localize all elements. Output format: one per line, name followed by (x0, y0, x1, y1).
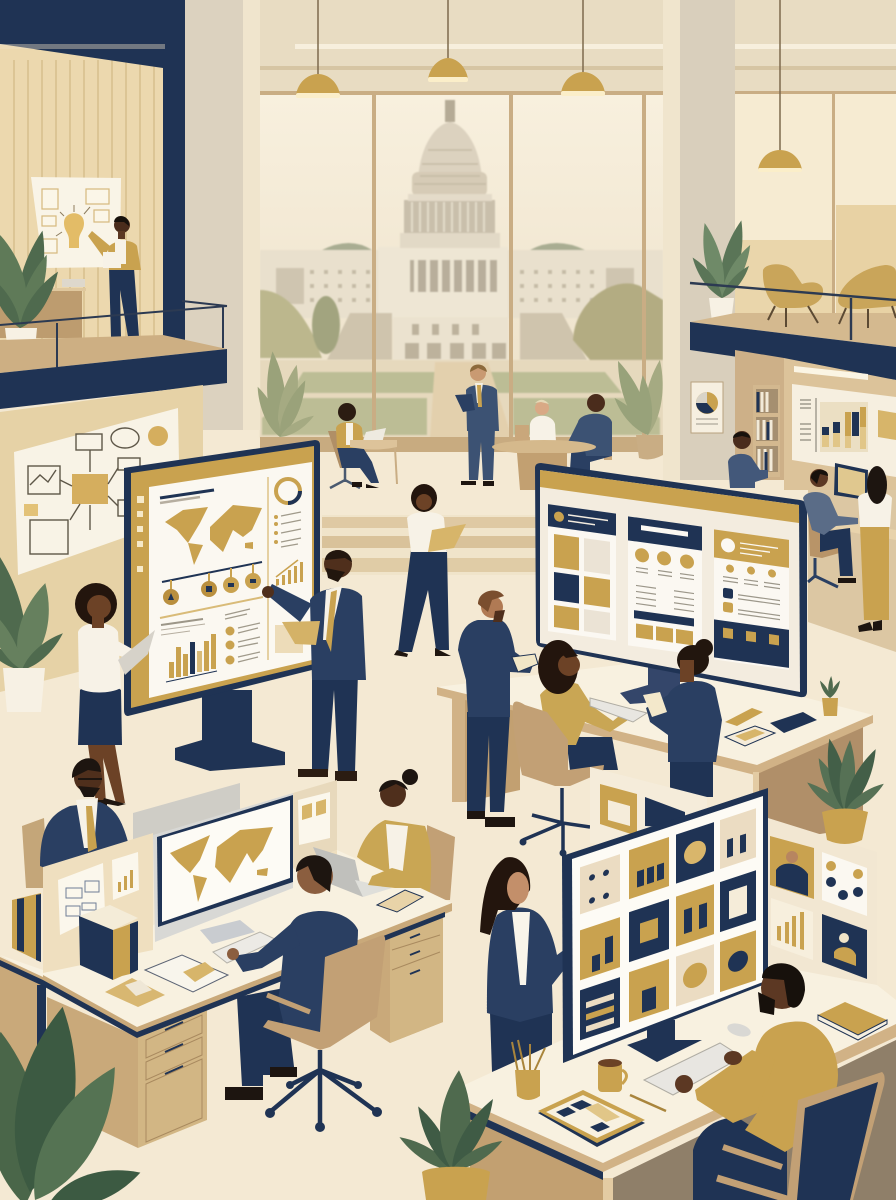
keyboard (644, 1043, 742, 1095)
binders right (79, 905, 138, 980)
person: man at shelf (728, 431, 768, 488)
keyboard, papers, book (105, 932, 277, 1007)
back right floor (808, 490, 896, 652)
trees and lawn (260, 283, 663, 438)
stairs (322, 515, 537, 575)
chart note (112, 852, 139, 900)
person: woman in navy blazer (480, 857, 577, 1072)
plant: window ficus right (610, 358, 668, 459)
person: presenter in navy suit (262, 550, 366, 781)
navy chair (717, 1072, 885, 1200)
pendant lamps (8, 0, 802, 172)
person: man in suit from behind (458, 590, 538, 827)
dashboard sidebar icons (137, 496, 144, 572)
Capitol building (260, 100, 663, 361)
plant: small desk plant (818, 676, 842, 716)
person: woman standing at monitor (643, 639, 722, 797)
office chair (263, 935, 385, 1132)
person: man with glasses (22, 758, 128, 888)
strip light (794, 366, 868, 380)
tablet of charts (538, 1090, 645, 1147)
bookshelf (753, 385, 780, 477)
right pedestal (370, 915, 443, 1043)
book (818, 1002, 887, 1040)
lounge chairs (763, 264, 896, 328)
back monitor (133, 783, 240, 842)
gold blazer arm (368, 868, 430, 888)
plant: window ficus left (252, 351, 316, 441)
monitor with map (153, 793, 293, 944)
person: woman seated with laptop (328, 403, 397, 488)
shelf and plant on upper balcony (0, 228, 86, 361)
pencil cup (512, 1040, 545, 1100)
columns (185, 0, 735, 480)
person: seated woman at middle desk (513, 640, 647, 856)
window mullions (260, 91, 663, 438)
window with Capitol view (260, 91, 663, 452)
left desk back: man in suit and woman (22, 758, 455, 900)
desk with monitor (825, 463, 896, 540)
person: presenter at top-left whiteboard (88, 216, 141, 347)
person: seated woman in gold blazer (357, 769, 455, 900)
left side panel (0, 963, 47, 1100)
world map (165, 505, 262, 565)
mouse (726, 1021, 752, 1039)
person: woman standing in gold trousers (858, 466, 892, 632)
plant: potted plant right (804, 737, 887, 844)
round table with seated pair (492, 394, 612, 490)
monitor: large dashboard (124, 440, 320, 771)
person: woman with tablet (75, 583, 155, 806)
bar chart (161, 619, 217, 682)
right art cards (770, 836, 867, 979)
balcony floor (690, 313, 896, 347)
chart board (792, 384, 896, 477)
person: standing man with tablet (455, 364, 499, 486)
under desk floor (613, 1040, 896, 1200)
person: seated man (803, 469, 858, 587)
person: walking woman with folder (394, 484, 466, 657)
laptop (313, 847, 392, 897)
panel right (714, 529, 789, 670)
keyboard (590, 698, 647, 722)
whiteboard with lightbulb (31, 177, 121, 268)
middle right desk (437, 660, 873, 845)
right background office group (728, 431, 896, 632)
desk: bottom right workstation (447, 788, 896, 1200)
desk: left workstation (0, 793, 452, 1148)
monitor: web panels (535, 463, 807, 704)
upper right window (735, 91, 896, 317)
whiteboard flow diagram (14, 408, 180, 575)
binders left (12, 893, 41, 962)
person: man seated from behind in navy (225, 855, 385, 1132)
monitor with tile grid (562, 788, 768, 1063)
people and table at back window (252, 351, 668, 490)
poster with pie chart (691, 382, 723, 433)
flow-chart note (58, 863, 105, 935)
list items (225, 609, 260, 664)
donut (276, 479, 300, 503)
front pedestal with drawers (138, 1007, 207, 1148)
office chair (513, 702, 604, 856)
navy leg (37, 985, 46, 1055)
plant: bottom left foreground (0, 1002, 145, 1200)
desk papers and books (725, 708, 817, 746)
panel middle (628, 516, 702, 656)
upper left balcony (0, 301, 227, 409)
lower left wall (0, 385, 203, 692)
pencil (630, 1095, 666, 1111)
right room wall with shelf and charts (691, 350, 896, 490)
plant: left wall plant with white pot (0, 550, 67, 712)
plant (688, 218, 756, 322)
panel left (548, 504, 616, 641)
note pinned panel (293, 780, 337, 870)
upper left mezzanine wall (0, 0, 185, 345)
side list (274, 515, 278, 544)
upper right balcony with lounge chairs (688, 218, 896, 380)
coffee mug (598, 1059, 626, 1092)
back cubicle wall with art panels (590, 767, 877, 997)
person: man at bottom right (675, 963, 885, 1200)
floor (0, 430, 896, 1200)
ceiling (0, 0, 896, 95)
timeline (162, 562, 262, 605)
partition (43, 833, 153, 973)
plant: bottom center foreground (396, 1069, 505, 1200)
right partition note backing (293, 850, 337, 873)
mini growth chart (276, 560, 303, 586)
desk surface (0, 850, 452, 1030)
tablet on desk (377, 890, 423, 912)
